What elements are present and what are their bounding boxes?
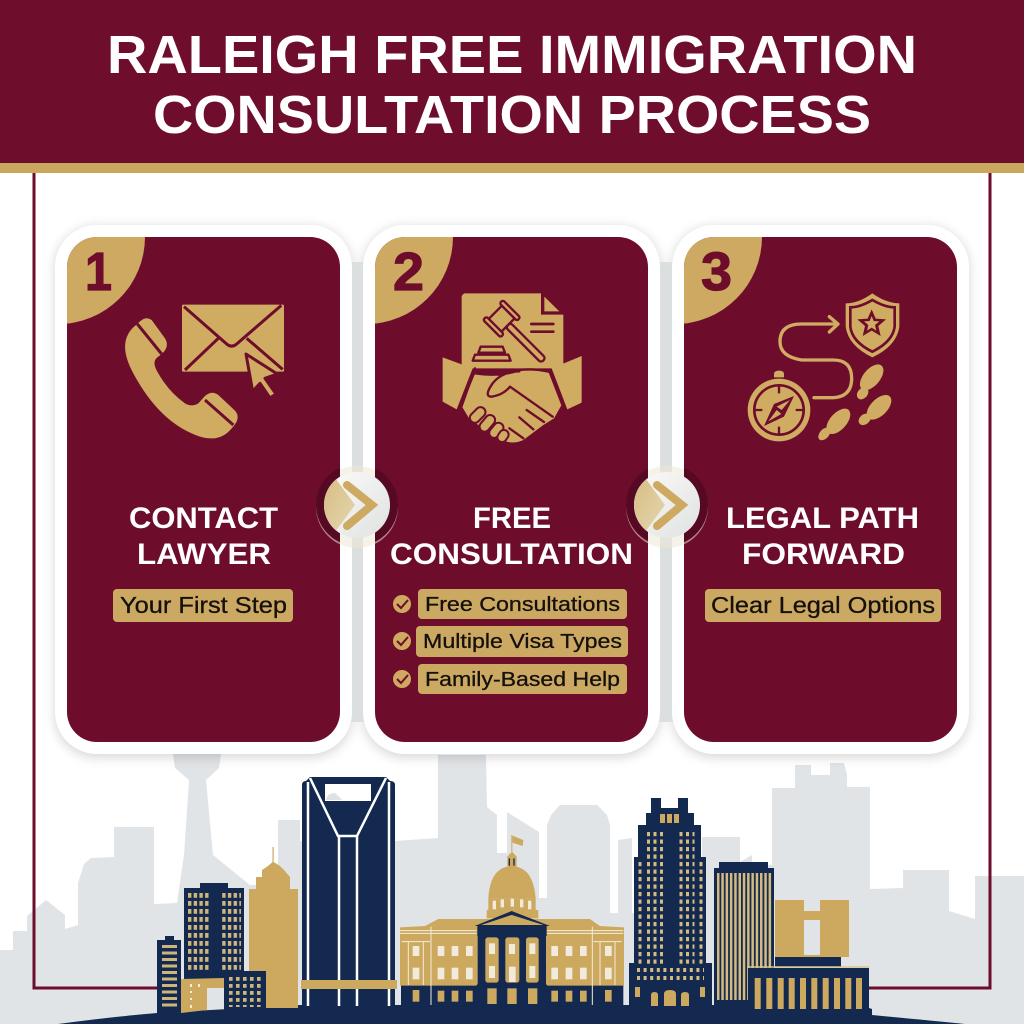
title: CONSULTATION PROCESS (153, 85, 871, 145)
step heading (390, 502, 633, 571)
skyline foreground (58, 777, 965, 1024)
step number badge 1 (67, 237, 145, 324)
step number badge 3: 3 (701, 242, 732, 302)
step heading (129, 502, 278, 571)
building: colonnade hall (747, 957, 872, 1016)
step heading: FORWARD (742, 538, 905, 571)
check item: family-based help (393, 664, 627, 694)
step heading: FREE (473, 502, 551, 535)
building: small striped tower (157, 936, 181, 1014)
step heading (726, 502, 919, 571)
check item: free consultations: Free Consultations (425, 593, 620, 616)
building: striped tower (714, 862, 774, 1006)
header banner (0, 0, 1024, 173)
step number badge 2: 2 (393, 242, 424, 302)
tag: your first step (113, 589, 293, 622)
step number badge 1: 1 (85, 242, 112, 302)
building: windowed navy tower (184, 883, 244, 985)
arrow: step 2 to 3 (626, 464, 708, 548)
check item: multiple visa types (393, 626, 628, 657)
check item: free consultations (393, 589, 627, 619)
arrow: step 1 to 2 (316, 464, 398, 548)
title (107, 25, 917, 145)
building: tall navy tower (301, 777, 397, 1006)
step heading: LEGAL PATH (726, 502, 919, 535)
step heading: LAWYER (137, 538, 271, 571)
step number badge 3 (684, 237, 762, 324)
panel: step 2 free consultation (363, 225, 660, 754)
icon: route, shield, compass and footprints (748, 293, 899, 443)
check item: family-based help: Family-Based Help (425, 668, 620, 691)
step number badge 2 (375, 237, 453, 324)
card shadows (55, 227, 969, 757)
tag: clear legal options (705, 589, 941, 622)
step heading: CONTACT (129, 502, 278, 535)
building: gold H block (775, 900, 849, 957)
icon: gavel document and handshake (443, 293, 582, 444)
tag: clear legal options: Clear Legal Options (711, 592, 935, 618)
step heading: CONSULTATION (390, 538, 633, 571)
panel: step 3 legal path forward (672, 225, 969, 754)
check item: multiple visa types: Multiple Visa Types (423, 630, 622, 653)
building: capitol (400, 835, 624, 1007)
building: art deco tower (629, 798, 712, 1007)
building: gold stepped tower (249, 847, 298, 1008)
icon: phone, envelope and cursor (125, 305, 284, 438)
background skyline silhouette (0, 754, 1024, 1024)
building: low navy block (224, 971, 266, 1010)
building: gold annex (181, 978, 224, 1013)
title: RALEIGH FREE IMMIGRATION (107, 25, 917, 85)
checklist (393, 589, 628, 694)
decorative frame (34, 173, 990, 988)
tag: your first step: Your First Step (120, 592, 287, 618)
panel: step 1 contact lawyer (55, 225, 352, 754)
ground (58, 1005, 965, 1024)
